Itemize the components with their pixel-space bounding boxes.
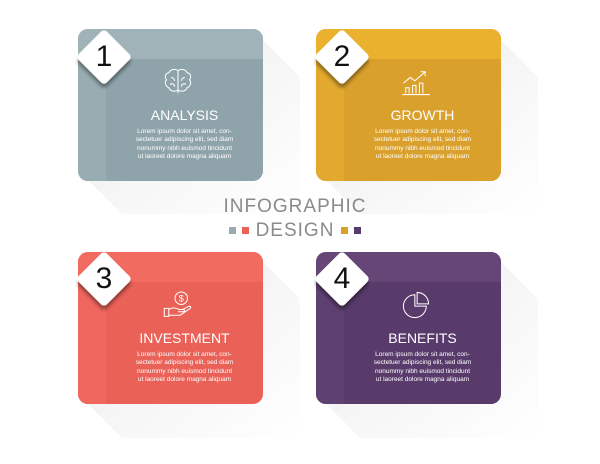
title	[224, 196, 366, 241]
text block: nonummy nibh euismod tincidunt	[137, 145, 232, 152]
icon: growth chart	[402, 71, 430, 96]
title: DESIGN	[256, 220, 334, 241]
text block: Lorem ipsum dolor sit amet, con-	[375, 351, 470, 358]
text block: ut laoreet dolore magna aliquam	[376, 153, 469, 160]
badge 1: 1	[96, 40, 112, 73]
text block: Lorem ipsum dolor sit amet, con-	[137, 351, 232, 358]
badge 4: 4	[334, 262, 350, 295]
text block: Lorem ipsum dolor sit amet, con-	[137, 128, 232, 135]
badge 3: 3	[96, 262, 112, 295]
text block	[136, 351, 233, 383]
text block: nonummy nibh euismod tincidunt	[137, 368, 232, 375]
panel: growth	[316, 29, 501, 181]
badge 3	[76, 252, 132, 312]
icon: pie chart	[402, 292, 430, 318]
text block: nonummy nibh euismod tincidunt	[375, 368, 470, 375]
icon: hand with coin: $	[179, 294, 184, 304]
text block: Lorem ipsum dolor sit amet, con-	[375, 128, 470, 135]
text block	[374, 128, 471, 160]
text block: ut laoreet dolore magna aliquam	[376, 376, 469, 383]
panel: analysis	[78, 29, 263, 181]
icon: brain	[164, 68, 192, 94]
text block: ut laoreet dolore magna aliquam	[138, 153, 231, 160]
text block: ut laoreet dolore magna aliquam	[138, 376, 231, 383]
text block: sectetuer adipiscing elit, sed diam	[374, 359, 471, 366]
panel: investment	[78, 252, 263, 404]
heading: ANALYSIS	[151, 107, 218, 123]
text block	[374, 351, 471, 383]
text block: sectetuer adipiscing elit, sed diam	[136, 136, 233, 143]
heading: BENEFITS	[388, 330, 457, 346]
badge 2: 2	[334, 40, 350, 73]
badge 4	[314, 252, 370, 311]
text block	[136, 128, 233, 160]
heading: GROWTH	[391, 107, 454, 123]
icon: hand with coin	[164, 292, 192, 317]
badge 2	[314, 30, 370, 90]
panel: benefits	[316, 252, 501, 404]
badge 1	[76, 30, 132, 90]
text block: nonummy nibh euismod tincidunt	[375, 145, 470, 152]
heading: INVESTMENT	[139, 330, 230, 346]
title: INFOGRAPHIC	[224, 196, 366, 217]
text block: sectetuer adipiscing elit, sed diam	[374, 136, 471, 143]
text block: sectetuer adipiscing elit, sed diam	[136, 359, 233, 366]
